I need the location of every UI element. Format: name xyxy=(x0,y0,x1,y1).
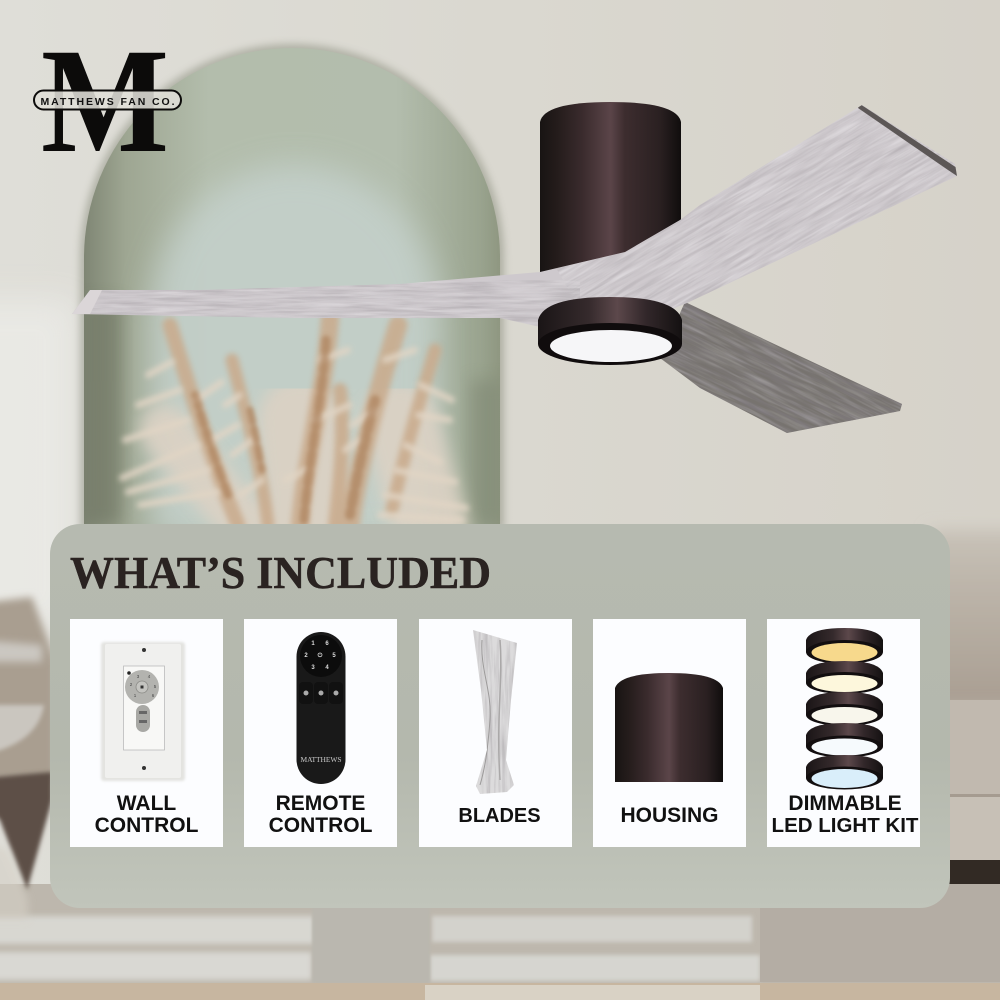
label: wall control: CONTROL xyxy=(95,814,199,837)
icon: remote control: 4 xyxy=(325,665,329,671)
card: dimmable led light kit xyxy=(767,619,920,847)
panel: what's included xyxy=(50,524,950,908)
card: remote control xyxy=(244,619,397,847)
label: remote control: REMOTE xyxy=(276,792,365,815)
icon: remote control: 2 xyxy=(304,653,308,659)
card: blades xyxy=(419,619,572,847)
icon: wall control: 3 xyxy=(137,674,140,679)
dark lower blade xyxy=(661,303,902,433)
led disc cool xyxy=(806,723,883,758)
logo pill with company name: MATTHEWS FAN CO. xyxy=(40,96,175,108)
icon: wall control: 2 xyxy=(130,682,133,687)
arch alcove xyxy=(80,44,504,540)
label: remote control: CONTROL xyxy=(269,814,373,837)
logo monogram: M xyxy=(41,18,169,184)
brand logo xyxy=(34,18,181,184)
floor xyxy=(0,884,1000,1000)
label: dimmable led light kit: DIMMABLE xyxy=(788,792,902,815)
icon: remote control: 3 xyxy=(311,665,315,671)
pampas grass xyxy=(122,318,466,525)
icon: wall control: 1 xyxy=(134,693,137,698)
led disc warm xyxy=(806,628,883,664)
icon: remote control: ⏻ xyxy=(318,652,323,659)
icon: led colour stack xyxy=(806,628,883,790)
icon: wall control: 5 xyxy=(154,684,157,689)
card: housing xyxy=(593,619,746,847)
icon: blade xyxy=(473,630,517,794)
logo pill with company name xyxy=(34,90,181,110)
fan housing xyxy=(540,102,681,285)
icon: housing cylinder xyxy=(615,673,723,782)
icon: remote control: 6 xyxy=(325,641,329,647)
icon: remote control: 5 xyxy=(332,653,336,659)
led light ring xyxy=(538,297,682,365)
led disc soft xyxy=(806,661,883,694)
label: housing: HOUSING xyxy=(620,804,719,827)
led disc neutral xyxy=(806,692,883,726)
ceiling fan xyxy=(72,102,957,433)
led lens xyxy=(550,330,672,362)
right sofa xyxy=(930,530,1000,884)
left sofa and cushions xyxy=(0,597,55,920)
icon: remote control xyxy=(296,632,346,784)
led disc daylight xyxy=(806,755,883,790)
icon: remote control: 1 xyxy=(311,641,315,647)
icon: wall control: 6 xyxy=(152,693,155,698)
label: blades: BLADES xyxy=(458,805,541,827)
label: dimmable led light kit: LED LIGHT KIT xyxy=(772,814,919,837)
icon: remote control: MATTHEWS xyxy=(300,755,342,764)
icon: wall control: 4 xyxy=(148,674,151,679)
card: wall control xyxy=(70,619,223,847)
label: wall control: WALL xyxy=(117,792,176,815)
heading: WHAT’S INCLUDED xyxy=(70,547,491,598)
light upper blades xyxy=(72,105,957,326)
icon: wall control xyxy=(101,642,185,781)
